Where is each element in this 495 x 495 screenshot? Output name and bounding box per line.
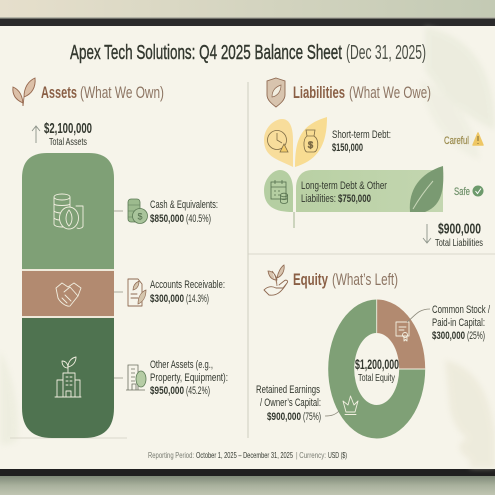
panel: equity [256, 265, 491, 439]
connector lines [114, 211, 123, 378]
status: careful: Careful [444, 135, 469, 147]
icon: certificate [396, 322, 409, 341]
item: cash: Cash & Equivalents: [150, 199, 218, 211]
icon: coins [54, 194, 83, 229]
donut chart [328, 299, 426, 439]
item: receivable: Accounts Receivable: [150, 279, 225, 291]
icon: crown [343, 396, 358, 414]
heading: equity [293, 270, 398, 289]
heading: equity: Equity [293, 270, 328, 289]
item: other assets [126, 359, 228, 397]
callout: retained earnings: (75%) [303, 411, 321, 423]
row: long-term debt: Long-term Debt & Other [301, 180, 387, 192]
status: safe: Safe [454, 186, 470, 198]
panel: assets [13, 78, 228, 438]
icon: calendar coins [271, 180, 288, 204]
callout: retained earnings: $900,000 [267, 411, 301, 423]
dividers [247, 82, 249, 438]
row: long-term debt: Liabilities: [301, 193, 336, 205]
item: other assets: $950,000 [150, 385, 184, 397]
row: long-term debt: $750,000 [338, 193, 371, 205]
green bar [296, 170, 443, 212]
footer: USD ($) [328, 450, 347, 460]
item: receivable: $300,000 [150, 293, 184, 305]
icon: hand with sprout [264, 265, 288, 295]
icon: building tree [126, 365, 146, 390]
heading: liabilities: Liabilities [293, 83, 345, 102]
icon: document leaf [128, 279, 146, 306]
heading: assets: (What We Own) [80, 83, 164, 102]
yellow leaves [264, 119, 293, 167]
row: short-term debt: $150,000 [332, 142, 363, 154]
panel: liabilities [264, 78, 484, 249]
row: short-term debt [264, 117, 391, 167]
dark leaf [410, 166, 443, 212]
donut center: Total Equity [358, 372, 396, 384]
row: short-term debt: Short-term Debt: [332, 129, 391, 141]
item: cash: $850,000 [150, 213, 184, 225]
item: other assets: Property, Equipment): [150, 372, 228, 384]
total assets: Total Assets [49, 136, 87, 148]
item: other assets: Other Assets (e.g., [150, 359, 213, 371]
item: receivable [128, 279, 225, 306]
title: Apex Tech Solutions: Q4 2025 Balance Sheet [70, 42, 342, 64]
callout: retained earnings [256, 384, 339, 423]
callout: common stock [407, 304, 491, 342]
total assets [44, 120, 92, 148]
callout: common stock: $300,000 [432, 330, 465, 342]
icon: clock warning [268, 130, 288, 152]
heading: liabilities: (What We Owe) [349, 83, 431, 102]
footer: Reporting Period: [148, 450, 194, 460]
heading: liabilities [293, 83, 431, 102]
heading: assets [41, 83, 164, 102]
item: other assets: (45.2%) [186, 385, 210, 397]
icon: building with sprout [55, 357, 81, 397]
donut center: $1,200,000 [355, 357, 399, 372]
icon: sprout [13, 78, 35, 106]
item: cash: (40.5%) [186, 213, 211, 225]
stacked bar [22, 153, 114, 438]
arrow down [423, 224, 431, 243]
icon: money bag: $ [308, 140, 313, 150]
green leaf capsule left [264, 170, 293, 212]
total liabilities [435, 222, 483, 249]
donut center [355, 357, 399, 384]
heading: assets: Assets [41, 83, 77, 102]
total assets: $2,100,000 [44, 120, 92, 137]
icon: handshake [56, 283, 81, 306]
footer: October 1, 2025 – December 31, 2025 [196, 450, 293, 460]
icon: shield [267, 78, 285, 107]
row: long-term debt [264, 166, 443, 228]
item: receivable: (14.3%) [186, 293, 209, 305]
title: (Dec 31, 2025) [346, 42, 426, 64]
heading: equity: (What’s Left) [332, 270, 398, 289]
callout: retained earnings: / Owner’s Capital: [260, 397, 321, 409]
item: cash [128, 199, 218, 225]
footer: | Currency: [296, 450, 326, 460]
icon: cash: $ [138, 212, 143, 222]
arrow up [32, 126, 40, 143]
stem [293, 212, 295, 228]
callout: retained earnings: Retained Earnings [256, 384, 320, 396]
